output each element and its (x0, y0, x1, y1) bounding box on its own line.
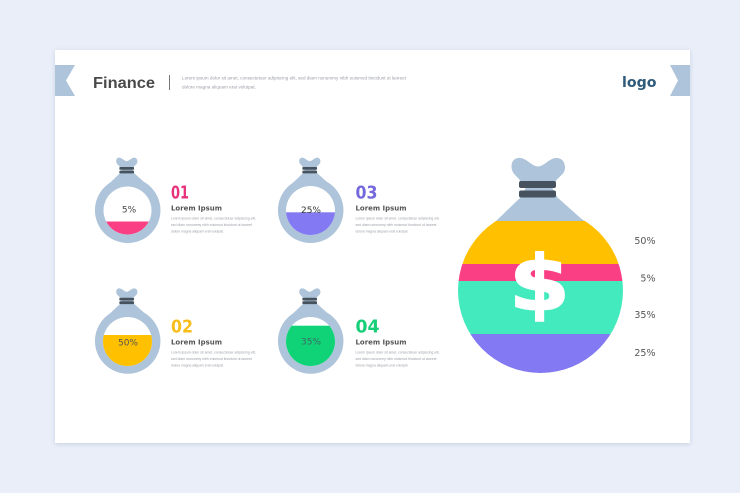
item 01 text: sed diam nonummy nibh euismod tincidunt ut laoreet (171, 222, 253, 227)
item 02: bag 50%: 50% (118, 338, 138, 348)
item 01 text: Lorem Ipsum (171, 204, 222, 212)
header description: Lorem ipsum dolor sit amet, consectetuer adipiscing elit, sed diam nonummy nibh euismod tincidunt ut laoreet (182, 76, 407, 80)
item 02 text: Lorem Ipsum (171, 338, 222, 346)
item 03 text: sed diam nonummy nibh euismod tincidunt ut laoreet (356, 222, 437, 227)
item 03 text: dolore magna aliquam erat volutpat. (356, 228, 408, 234)
item 04 text (356, 318, 440, 368)
big money bag chart (450, 158, 630, 374)
item 02 text: sed diam nonummy nibh euismod tincidunt ut laoreet (171, 356, 253, 361)
item 02 text: dolore magna aliquam erat volutpat. (171, 362, 224, 368)
item 01 text: dolore magna aliquam erat volutpat. (171, 228, 224, 234)
item 02: bag 50% (95, 288, 160, 374)
item 01 text: Lorem ipsum dolor sit amet, consectetuer adipiscing elit, (171, 216, 256, 220)
item 04 text: sed diam nonummy nibh euismod tincidunt ut laoreet (356, 356, 437, 361)
item 02 text: Lorem ipsum dolor sit amet, consectetuer adipiscing elit, (171, 350, 256, 354)
item 01: bag 5% (95, 158, 160, 243)
header description (182, 76, 407, 90)
item 01 text: 01 (171, 184, 189, 204)
ribbon left (55, 65, 75, 96)
logo: logo (622, 75, 657, 91)
big bag percentage labels: 5% (640, 274, 656, 284)
item 03: bag 25% (278, 158, 343, 243)
item 04 text: dolore magna aliquam erat volutpat. (356, 362, 408, 368)
item 03 text: 03 (356, 184, 378, 204)
title divider (169, 75, 170, 90)
item 04 text: 04 (356, 318, 380, 338)
item 01 text (171, 184, 256, 234)
item 01: bag 5%: 5% (122, 206, 137, 216)
icon: dollar sign: $ (509, 240, 570, 328)
item 04 text: Lorem Ipsum (356, 338, 406, 346)
big bag percentage labels: 50% (634, 236, 656, 247)
item 04: bag 35% (278, 288, 343, 374)
panel: card (55, 50, 690, 443)
item 02 text (171, 318, 256, 368)
item 03: bag 25%: 25% (301, 206, 321, 216)
item 03 text (356, 184, 440, 234)
ribbon right (670, 65, 690, 96)
header description: dolore magna aliquam erat volutpat. (182, 84, 256, 90)
item 03 text: Lorem Ipsum (356, 204, 406, 212)
item 02 text: 02 (171, 318, 193, 338)
item 04 text: Lorem ipsum dolor sit amet, consectetuer adipiscing elit, (356, 350, 440, 354)
big bag percentage labels: 35% (634, 310, 656, 321)
title: Finance (93, 75, 155, 92)
big bag percentage labels (634, 236, 656, 359)
item 04: bag 35%: 35% (301, 338, 321, 348)
item 03 text: Lorem ipsum dolor sit amet, consectetuer adipiscing elit, (356, 216, 440, 220)
big bag percentage labels: 25% (634, 348, 656, 359)
